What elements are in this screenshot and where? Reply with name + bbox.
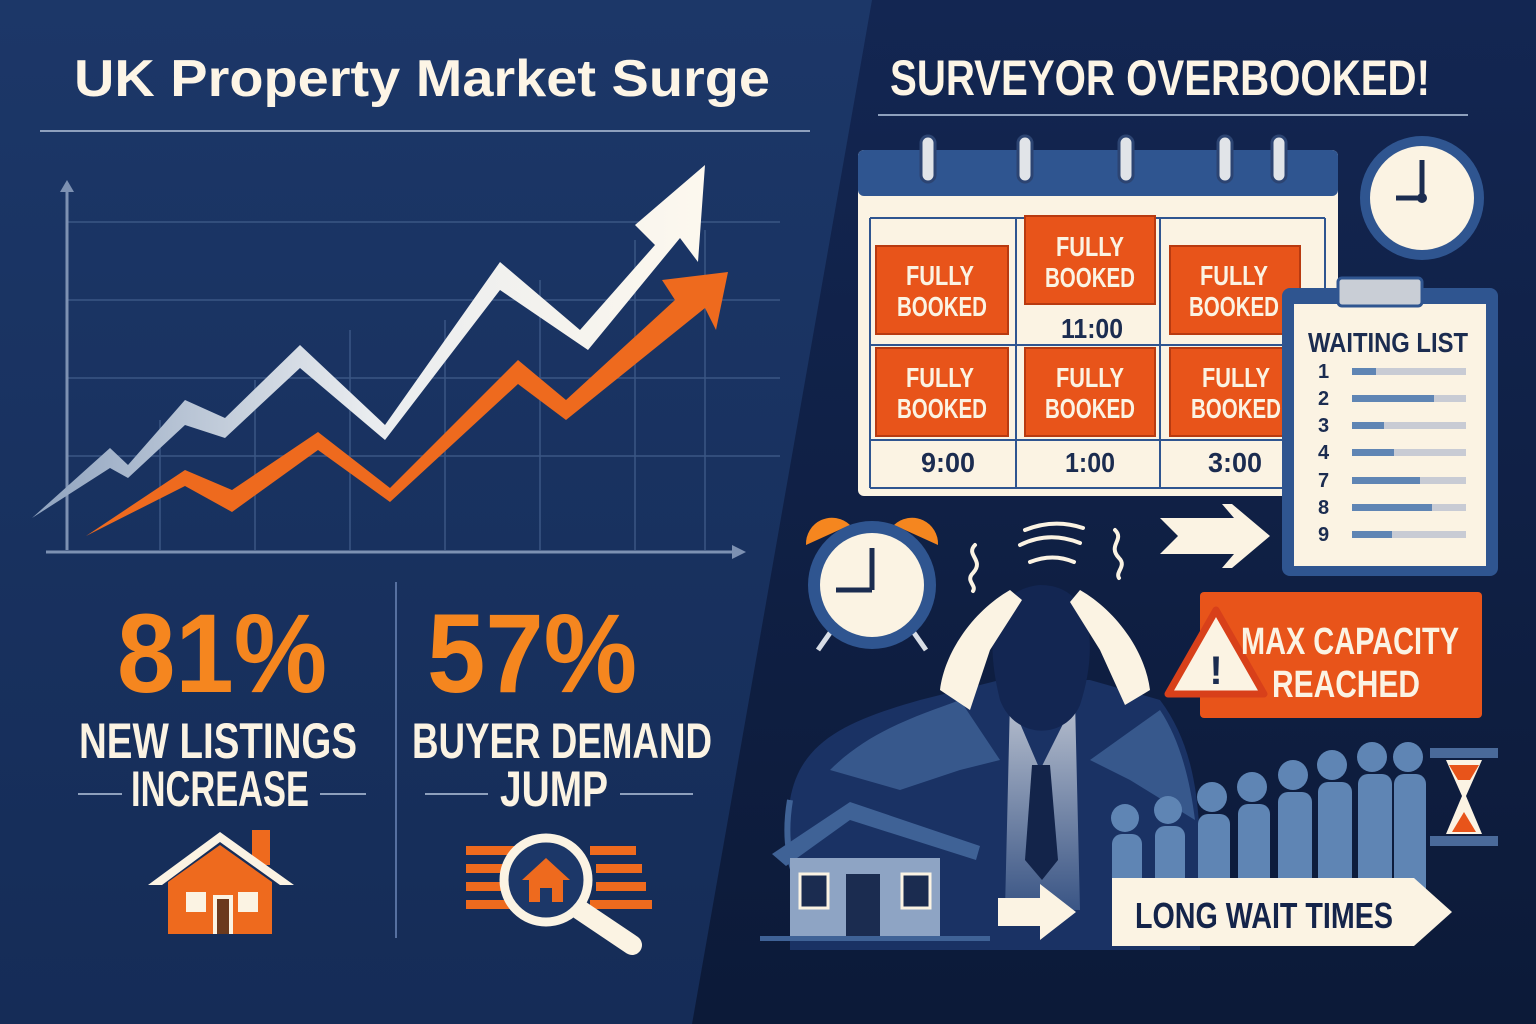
icon: grey house <box>760 802 990 941</box>
banner: LONG WAIT TIMES: LONG WAIT TIMES <box>1135 895 1393 936</box>
stat: 81%: NEW LISTINGS <box>79 713 357 769</box>
calendar: BOOKED <box>1189 291 1279 322</box>
icon: wall clock <box>1360 136 1484 260</box>
icon: hourglass <box>1430 748 1498 846</box>
queue of people <box>1111 742 1426 904</box>
stat: 81%: 81% <box>117 591 327 716</box>
clipboard: waiting list: 1 <box>1318 361 1329 383</box>
calendar: 3:00 <box>1208 447 1262 478</box>
arrow to waiting list <box>1160 504 1270 568</box>
clipboard: waiting list: 9 <box>1318 524 1329 546</box>
line chart: growth <box>32 165 780 559</box>
calendar: FULLY <box>1056 231 1124 262</box>
icon: alarm clock <box>806 518 938 650</box>
clipboard: waiting list: WAITING LIST <box>1308 327 1468 358</box>
calendar: FULLY <box>1056 362 1124 393</box>
stat: 57%: BUYER DEMAND <box>412 713 712 769</box>
stressed surveyor figure <box>787 524 1200 950</box>
calendar: BOOKED <box>1045 393 1135 424</box>
stat: 57%: 57% <box>427 591 637 716</box>
calendar: 11:00 <box>1061 313 1123 344</box>
calendar: BOOKED <box>897 393 987 424</box>
stat: 81% <box>78 591 366 817</box>
calendar: FULLY <box>1202 362 1270 393</box>
stat: 57%: JUMP <box>500 761 608 817</box>
title: UK Property Market Surge: UK Property Market Surge <box>74 50 770 108</box>
clipboard: waiting list <box>1282 278 1498 576</box>
calendar: 9:00 <box>921 447 975 478</box>
callout: MAX CAPACITY REACHED: REACHED <box>1272 664 1420 706</box>
calendar: 1:00 <box>1065 447 1115 478</box>
clipboard: waiting list: 4 <box>1318 442 1330 464</box>
callout: MAX CAPACITY REACHED: MAX CAPACITY <box>1241 621 1459 663</box>
calendar: FULLY <box>906 362 974 393</box>
arrow to wait times <box>998 884 1076 940</box>
calendar: BOOKED <box>1191 393 1281 424</box>
clipboard: waiting list: 7 <box>1318 470 1329 492</box>
calendar <box>858 136 1338 496</box>
stat: 57% <box>412 591 712 817</box>
icon: house <box>148 830 294 934</box>
calendar: BOOKED <box>897 291 987 322</box>
callout: MAX CAPACITY REACHED <box>1168 592 1482 718</box>
calendar: FULLY <box>1200 260 1268 291</box>
icon: magnifier over listings <box>466 838 652 945</box>
clipboard: waiting list: 8 <box>1318 497 1329 519</box>
clipboard: waiting list: 2 <box>1318 388 1329 410</box>
calendar: BOOKED <box>1045 262 1135 293</box>
calendar: FULLY <box>906 260 974 291</box>
banner: LONG WAIT TIMES <box>1112 878 1452 946</box>
stat: 81%: INCREASE <box>131 761 309 817</box>
callout: MAX CAPACITY REACHED: ! <box>1209 649 1223 693</box>
clipboard: waiting list: 3 <box>1318 415 1329 437</box>
